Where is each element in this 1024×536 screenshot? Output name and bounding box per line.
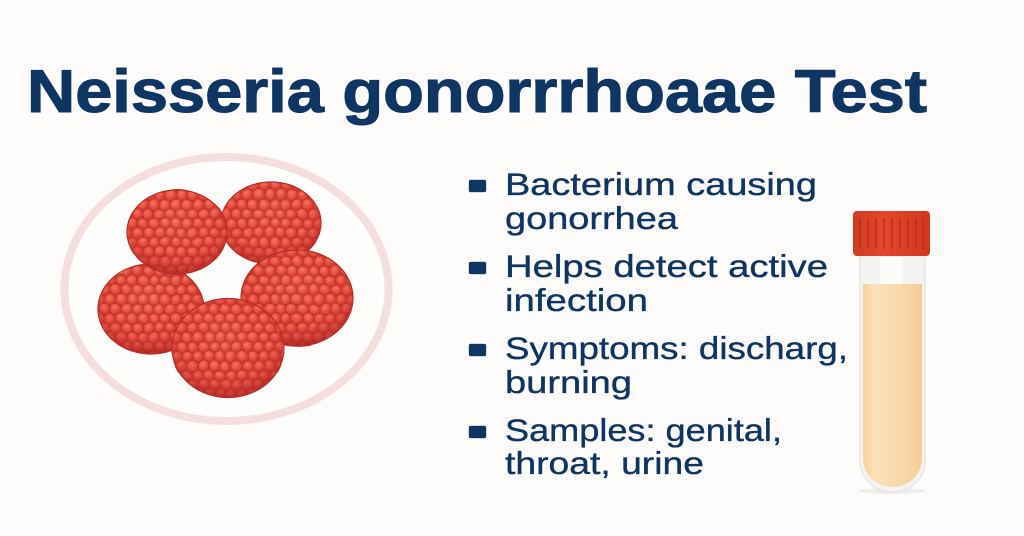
- coccus: right: [241, 250, 353, 346]
- coccus: bottom: [172, 298, 284, 398]
- bullet: samples: [469, 412, 782, 481]
- coccus: top left: [127, 190, 227, 274]
- glass body: [860, 250, 925, 492]
- bullet: symptoms: [469, 330, 848, 400]
- bullet: bacterium: Bacterium causing: [505, 166, 817, 202]
- bullet: symptoms: burning: [505, 364, 632, 400]
- illustration: bacteria cluster in ring: [64, 157, 388, 421]
- icon: test tube: [853, 211, 930, 494]
- coccus: top right: [221, 182, 321, 264]
- bullet: detection: Helps detect active: [505, 248, 828, 284]
- liquid: [863, 284, 922, 487]
- bullet: symptoms: Symptoms: discharg,: [505, 330, 848, 366]
- red cap: [853, 211, 930, 256]
- tube shadow: [858, 488, 926, 494]
- coccus: left: [98, 264, 204, 354]
- glass highlight: [880, 257, 902, 284]
- bullet: samples: throat, urine: [505, 445, 704, 481]
- bullet: detection: [469, 248, 828, 318]
- bullet: bacterium: [469, 166, 817, 236]
- bullet list: [469, 166, 848, 481]
- pink ring: [64, 157, 388, 421]
- bullet: detection: infection: [505, 282, 648, 318]
- bullet: samples: Samples: genital,: [505, 412, 782, 448]
- title: Neisseria gonorrrhoaae Test: [27, 58, 927, 125]
- bullet: bacterium: gonorrhea: [505, 200, 679, 236]
